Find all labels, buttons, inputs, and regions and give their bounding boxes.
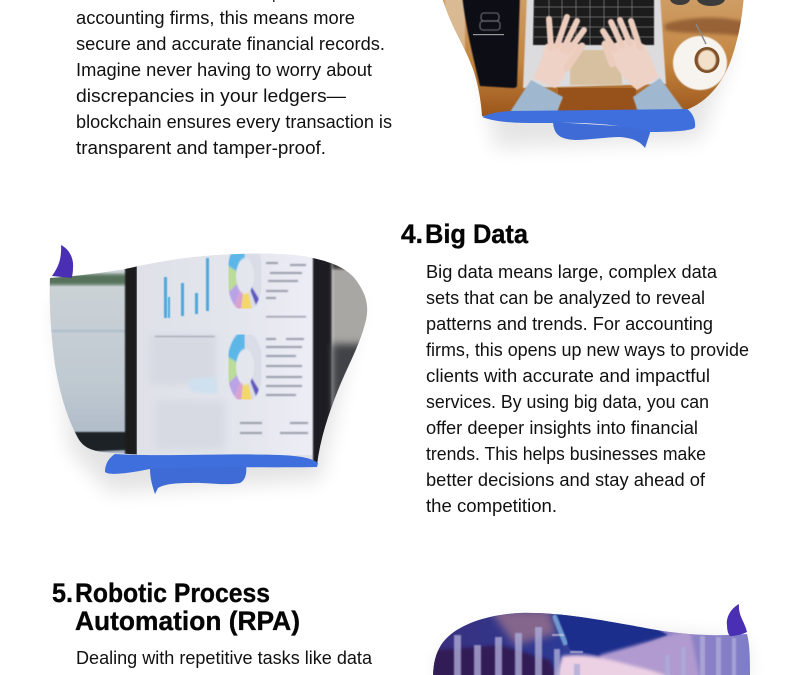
chart: lower donut [232, 340, 258, 394]
heading: 5. Robotic Process Automation (RPA): 5. [52, 578, 73, 608]
body text: section 3 [76, 0, 392, 158]
body text: Big Data: trends. This helps businesses make [426, 443, 706, 464]
body text: Big Data: better decisions and stay ahead of [426, 469, 706, 490]
brush stroke: laptop image [482, 109, 695, 148]
heading: 5. Robotic Process Automation (RPA) [52, 578, 300, 636]
body text: Big Data: clients with accurate and impactful [426, 365, 710, 386]
chart: upper donut [232, 249, 258, 303]
body text: section 3: blockchain ensures every transaction is [76, 111, 392, 132]
body text: section 3: transparent and tamper-proof. [76, 137, 326, 158]
body text: RPA: Dealing with repetitive tasks like data [76, 647, 373, 668]
image: hands typing on a laptop [430, 0, 760, 148]
image: robotic process automation hand and chart [430, 604, 755, 675]
icon: purple flame accent [727, 604, 747, 636]
body text: section 3: Imagine never having to worry about [76, 59, 372, 80]
body text: Big Data: firms, this opens up new ways to provide [426, 339, 749, 360]
body text: Big Data: sets that can be analyzed to reveal [426, 287, 705, 308]
icon: purple flame accent [52, 245, 73, 278]
body text: section 3: secure and accurate financial records. [76, 33, 385, 54]
heading: 4. Big Data: Big Data [425, 219, 529, 249]
body text: Big Data [426, 261, 749, 516]
body text: section 3: discrepancies in your ledgers— [76, 85, 347, 106]
body text: Big Data: the competition. [426, 495, 557, 516]
body text: section 3: accounting firms, this means more [76, 7, 355, 28]
brush stroke: dashboard image [105, 454, 318, 494]
heading: 4. Big Data: 4. [401, 219, 423, 249]
heading: 5. Robotic Process Automation (RPA): Robotic Process [75, 578, 270, 608]
image: analytics dashboard monitors [40, 245, 375, 494]
body text: Big Data: services. By using big data, you can [426, 391, 709, 412]
body text: Big Data: patterns and trends. For accounting [426, 313, 713, 334]
heading: 5. Robotic Process Automation (RPA): Automation (RPA) [75, 606, 300, 636]
body text: Big Data: offer deeper insights into financial [426, 417, 698, 438]
body text: Big Data: Big data means large, complex data [426, 261, 718, 282]
